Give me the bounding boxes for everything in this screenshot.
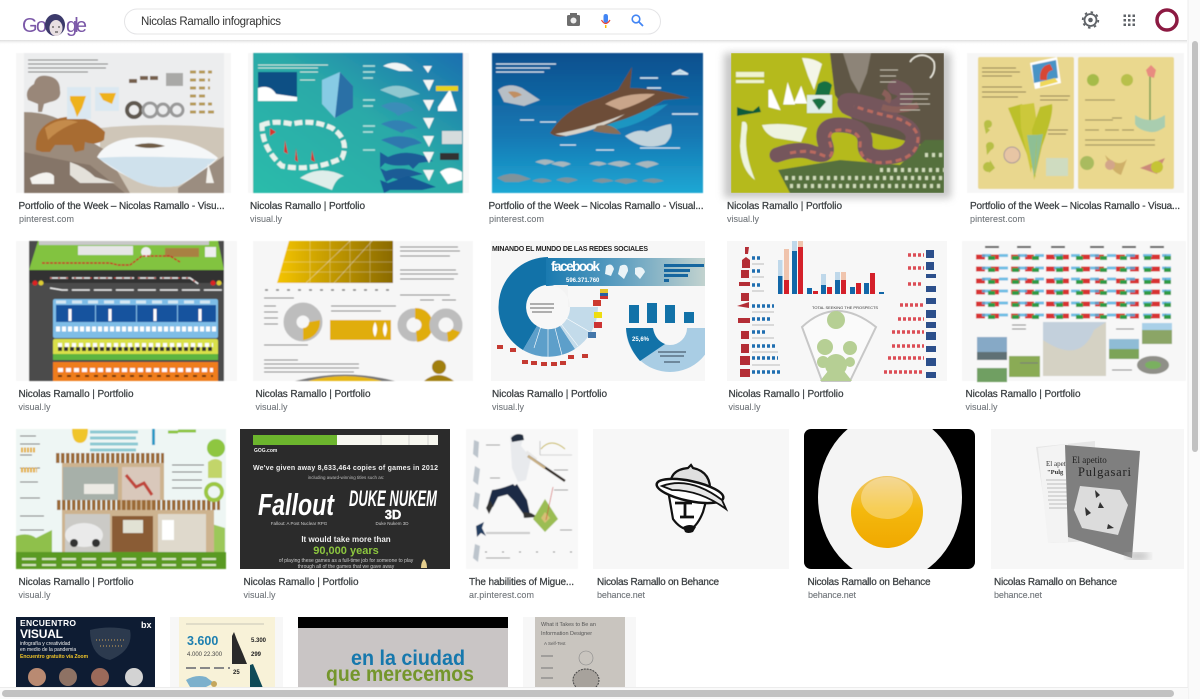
- thumbnail: baseball player infographic: [466, 429, 578, 569]
- thumbnail: dolphin infographic: [492, 53, 703, 193]
- thumbnail: free games infographic: including award-winning titles such as:: [308, 475, 384, 480]
- caption: thumbnail 11: Nicolas Ramallo | Portfolio: [18, 577, 134, 588]
- caption: thumbnail 10: Nicolas Ramallo | Portfolio: [966, 389, 1081, 400]
- caption: thumbnail 14: behance.net: [597, 590, 645, 600]
- caption: thumbnail 13: [469, 577, 574, 600]
- thumbnail: fried egg: [804, 429, 975, 569]
- caption: thumbnail 3: [488, 201, 704, 224]
- caption: thumbnail 10: [966, 389, 1081, 412]
- thumbnail: information designer book page: What it Takes to Be an: [541, 622, 596, 628]
- thumbnail: 3.600 statistics: 299: [251, 652, 262, 658]
- caption: thumbnail 12: [244, 577, 359, 600]
- caption: thumbnail 2: visual.ly: [250, 214, 282, 224]
- thumbnail: social networks infographic: [492, 246, 705, 372]
- caption: thumbnail 7: visual.ly: [256, 402, 288, 412]
- thumbnail: Encuentro Visual poster: ENCUENTRO: [20, 618, 76, 628]
- caption: thumbnail 16: Nicolas Ramallo on Behance: [994, 577, 1117, 588]
- thumbnail: 3.600 statistics: 3.600: [187, 634, 218, 648]
- thumbnail: social networks infographic: 596.371.760: [566, 278, 600, 284]
- thumbnail: information designer book page: [523, 617, 636, 691]
- caption: thumbnail 1: Portfolio of the Week – Nicolas Ramallo - Visu...: [18, 201, 224, 212]
- caption: thumbnail 3: Portfolio of the Week – Nicolas Ramallo - Visual...: [488, 201, 704, 212]
- thumbnail: 3.600 statistics: 4.000 22.300: [187, 652, 223, 658]
- caption: thumbnail 14: Nicolas Ramallo on Behance: [597, 577, 719, 588]
- caption: thumbnail 15: [808, 577, 931, 600]
- thumbnail: free games infographic: of playing these games as a full-time job for someone to play: [279, 558, 414, 564]
- thumbnail: baseball chart infographic: TOTAL SEEKING THE PROSPECTS: [812, 305, 878, 310]
- caption: thumbnail 5: pinterest.com: [970, 214, 1025, 224]
- thumbnail: free games infographic: 3D: [385, 507, 401, 522]
- thumbnail: free games infographic: We've given away 8,633,464 copies of games in 2012: [253, 465, 438, 472]
- icon: camera: [567, 13, 580, 26]
- thumbnail: en la ciudad que merecemos: [298, 617, 508, 687]
- caption: thumbnail 8: Nicolas Ramallo | Portfolio: [492, 389, 607, 400]
- thumbnail: Encuentro Visual poster: Encuentro gratuito vía Zoom: [20, 654, 89, 660]
- search box: Nicolas Ramallo infographics: [141, 16, 281, 28]
- icon: account ring: [1157, 10, 1177, 30]
- caption: thumbnail 4: Nicolas Ramallo | Portfolio: [727, 201, 842, 212]
- thumbnail: free games infographic: Fallout: A Post Nuclear RPG: [271, 521, 328, 526]
- thumbnail: free games infographic: 90,000 years: [313, 545, 379, 557]
- thumbnail: free games infographic: [240, 429, 450, 570]
- caption: thumbnail 6: [18, 389, 134, 412]
- caption: thumbnail 7: [256, 389, 371, 412]
- header shadow: [0, 40, 1187, 45]
- thumbnail: information designer book page: Information Designer: [541, 631, 592, 637]
- thumbnail: shark infographic: [248, 53, 469, 193]
- thumbnail: book El apetito de Pulgasari: El apetito: [1072, 455, 1107, 465]
- thumbnail: social networks infographic: facebook: [551, 259, 600, 274]
- caption: thumbnail 11: [18, 577, 134, 600]
- caption: thumbnail 3: pinterest.com: [489, 214, 544, 224]
- thumbnail: free games infographic: Duke Nukem 3D: [375, 521, 409, 526]
- caption: thumbnail 15: Nicolas Ramallo on Behance: [808, 577, 931, 588]
- thumbnail: Encuentro Visual poster: en medio de la pandemia: [20, 647, 76, 653]
- thumbnail: free games infographic: Fallout: [258, 487, 335, 522]
- icon: microphone: [602, 14, 610, 28]
- caption: thumbnail 7: Nicolas Ramallo | Portfolio: [256, 389, 371, 400]
- thumbnail: free games infographic: GOG.com: [254, 448, 278, 454]
- search box: [124, 9, 660, 34]
- thumbnail: airport layers infographic: [16, 241, 237, 381]
- thumbnail: book El apetito de Pulgasari: El apet: [1046, 460, 1066, 468]
- caption: thumbnail 5: Portfolio of the Week – Nicolas Ramallo - Visua...: [970, 201, 1180, 212]
- logo: Go: [22, 15, 47, 37]
- caption: thumbnail 16: [994, 577, 1117, 600]
- thumbnail: 3.600 statistics: 25: [233, 670, 240, 676]
- caption: thumbnail 13: ar.pinterest.com: [469, 590, 534, 600]
- caption: thumbnail 13: The habilities of Migue...: [469, 577, 574, 588]
- thumbnail: free games infographic: DUKE NUKEM: [349, 486, 437, 511]
- logo: [22, 14, 87, 37]
- thumbnail: 3.600 statistics: 5.300: [251, 638, 267, 644]
- caption: thumbnail 16: behance.net: [994, 590, 1042, 600]
- caption: thumbnail 1: pinterest.com: [19, 214, 74, 224]
- thumbnail: social networks infographic: MINANDO EL MUNDO DE LAS REDES SOCIALES: [492, 246, 648, 253]
- thumbnail: information designer book page: A Self-Test: [544, 641, 566, 646]
- thumbnail: baseball chart infographic: [727, 241, 947, 381]
- thumbnail: free games infographic: It would take more than: [301, 535, 391, 544]
- thumbnail: Encuentro Visual poster: infografía y creatividad: [20, 641, 71, 647]
- icon: apps grid: [1124, 14, 1135, 26]
- thumbnail: free games infographic: through all of the games that we gave away: [298, 564, 395, 570]
- logo: gle: [66, 15, 87, 37]
- thumbnail: eco house infographic: [16, 429, 226, 569]
- caption: thumbnail 4: [727, 201, 842, 224]
- caption: thumbnail 1: [18, 201, 224, 224]
- thumbnail: book El apetito de Pulgasari: [991, 429, 1184, 569]
- vertical scrollbar: [1188, 0, 1200, 699]
- caption: thumbnail 9: [728, 389, 844, 412]
- caption: thumbnail 10: visual.ly: [966, 402, 998, 412]
- icon: magnifier: [632, 15, 643, 26]
- thumbnail: book El apetito de Pulgasari: "Pulg: [1047, 469, 1064, 476]
- caption: thumbnail 15: behance.net: [808, 590, 856, 600]
- caption: thumbnail 9: Nicolas Ramallo | Portfolio: [728, 389, 844, 400]
- thumbnail: yellow charts infographic: [253, 241, 473, 381]
- caption: thumbnail 12: visual.ly: [244, 590, 276, 600]
- caption: thumbnail 2: [250, 201, 365, 224]
- thumbnail: pith helmet logo: [593, 429, 789, 569]
- thumbnail: Encuentro Visual poster: VISUAL: [20, 627, 63, 641]
- caption: thumbnail 14: [597, 577, 719, 600]
- thumbnail: 3.600 statistics: [170, 617, 283, 688]
- caption: thumbnail 12: Nicolas Ramallo | Portfolio: [244, 577, 359, 588]
- thumbnail: world cup groups infographic: [962, 241, 1186, 382]
- icon: settings gear: [1083, 12, 1098, 28]
- thumbnail: capybara infographic: [16, 53, 231, 193]
- thumbnail: anaconda infographic: [724, 53, 951, 198]
- thumbnail: book El apetito de Pulgasari: Pulgasari: [1078, 465, 1132, 479]
- thumbnail: en la ciudad que merecemos: en la ciudad: [351, 647, 465, 670]
- caption: thumbnail 8: [492, 389, 607, 412]
- caption: thumbnail 5: [970, 201, 1180, 224]
- thumbnail: Encuentro Visual poster: [16, 617, 155, 687]
- horizontal scrollbar: [0, 688, 1188, 699]
- caption: thumbnail 6: visual.ly: [18, 402, 51, 412]
- caption: thumbnail 2: Nicolas Ramallo | Portfolio: [250, 201, 365, 212]
- caption: thumbnail 8: visual.ly: [492, 402, 524, 412]
- thumbnail: carnivorous plants infographic: [967, 53, 1184, 193]
- thumbnail: social networks infographic: 25,6%: [632, 337, 650, 343]
- caption: thumbnail 11: visual.ly: [18, 590, 51, 600]
- caption: thumbnail 4: visual.ly: [727, 214, 760, 224]
- caption: thumbnail 9: visual.ly: [728, 402, 761, 412]
- caption: thumbnail 6: Nicolas Ramallo | Portfolio: [18, 389, 134, 400]
- thumbnail: Encuentro Visual poster: bx: [141, 620, 152, 630]
- header bar: [0, 0, 1187, 40]
- thumbnail: en la ciudad que merecemos: que merecemos: [326, 663, 474, 686]
